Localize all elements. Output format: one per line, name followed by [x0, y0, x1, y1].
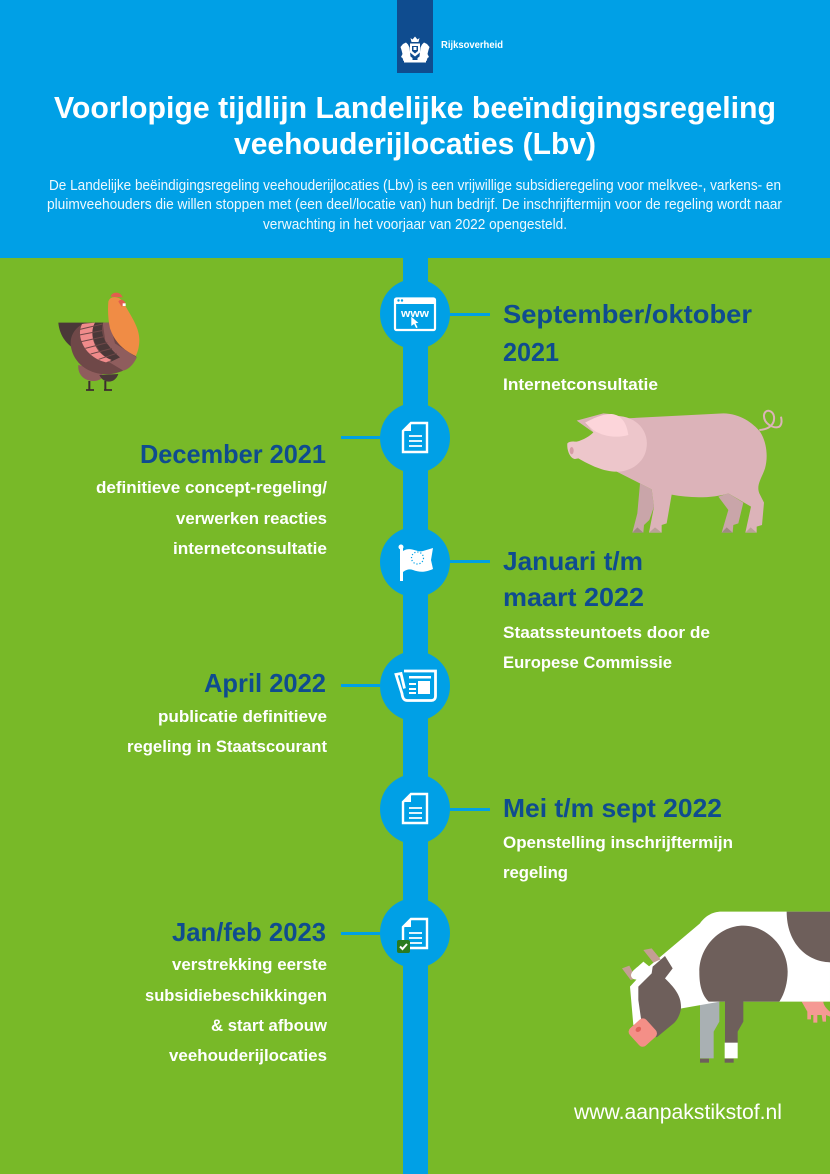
- timeline node: approved document icon: [380, 898, 450, 968]
- milestone: Januari t/m maart 2022: Januari t/m: [503, 546, 643, 576]
- milestone: Mei t/m sept 2022: [503, 793, 733, 882]
- title: [54, 90, 776, 161]
- illustration: cow: [622, 912, 830, 1063]
- milestone: Jan/feb 2023: Jan/feb 2023: [172, 917, 326, 947]
- milestone: December 2021: verwerken reacties: [176, 510, 327, 528]
- milestone: September/oktober 2021: September/oktober: [503, 299, 752, 329]
- illustration: pig: [567, 411, 782, 533]
- timeline node: newspaper icon: [380, 651, 450, 721]
- title: veehouderijlocaties (Lbv): [234, 126, 596, 161]
- intro text: pluimveehouders die willen stoppen met (een deel/locatie van) hun bedrijf. De inschrijftermijn voor de regeling wordt naar: [47, 197, 782, 213]
- timeline node: document icon: [380, 403, 450, 473]
- milestone: Mei t/m sept 2022: Openstelling inschrijftermijn: [503, 834, 733, 852]
- milestone: Januari t/m maart 2022: [503, 546, 710, 672]
- milestone: September/oktober 2021: [503, 299, 752, 394]
- connector lines: [341, 313, 490, 935]
- milestone: Januari t/m maart 2022: Staatssteuntoets door de: [503, 624, 710, 642]
- milestone: April 2022: April 2022: [204, 668, 326, 698]
- milestone: April 2022: regeling in Staatscourant: [127, 738, 328, 756]
- intro text: [47, 178, 782, 233]
- timeline node: www icon: www: [400, 308, 429, 320]
- logo: Rijksoverheid: [397, 0, 503, 73]
- timeline node: document icon: [380, 774, 450, 844]
- title: Voorlopige tijdlijn Landelijke beeïndigingsregeling: [54, 90, 776, 125]
- milestone: September/oktober 2021: Internetconsultatie: [503, 376, 658, 394]
- milestone: Januari t/m maart 2022: maart 2022: [503, 582, 644, 612]
- milestone: Jan/feb 2023: subsidiebeschikkingen: [145, 987, 327, 1005]
- milestone: April 2022: [127, 668, 328, 756]
- milestone: April 2022: publicatie definitieve: [158, 708, 327, 726]
- milestone: Jan/feb 2023: & start afbouw: [211, 1017, 327, 1035]
- intro text: De Landelijke beëindigingsregeling veehouderijlocaties (Lbv) is een vrijwillige subsidieregeling voor melkvee-, varkens- en: [49, 178, 781, 194]
- milestone: Mei t/m sept 2022: Mei t/m sept 2022: [503, 793, 722, 823]
- milestone: Jan/feb 2023: veehouderijlocaties: [169, 1047, 327, 1065]
- website url: www.aanpakstikstof.nl: [573, 1101, 782, 1124]
- milestone: September/oktober 2021: 2021: [503, 337, 559, 367]
- logo: Rijksoverheid: Rijksoverheid: [441, 39, 503, 51]
- illustration: chicken: [58, 293, 139, 390]
- milestone: December 2021: definitieve concept-regeling/: [96, 479, 327, 497]
- milestone: December 2021: [96, 439, 327, 558]
- panel: blue header: [0, 0, 830, 258]
- timeline spine: [403, 258, 428, 1174]
- milestone: December 2021: internetconsultatie: [173, 540, 327, 558]
- milestone: Jan/feb 2023: verstrekking eerste: [172, 956, 327, 974]
- milestone: Jan/feb 2023: [145, 917, 327, 1065]
- milestone: December 2021: December 2021: [140, 439, 326, 469]
- milestone: Januari t/m maart 2022: Europese Commissie: [503, 654, 672, 672]
- timeline node: www icon: [380, 279, 450, 349]
- milestone: Mei t/m sept 2022: regeling: [503, 864, 568, 882]
- timeline node: EU flag icon: [380, 527, 450, 597]
- panel: green background: [0, 258, 830, 1174]
- intro text: verwachting in het voorjaar van 2022 opengesteld.: [263, 217, 567, 233]
